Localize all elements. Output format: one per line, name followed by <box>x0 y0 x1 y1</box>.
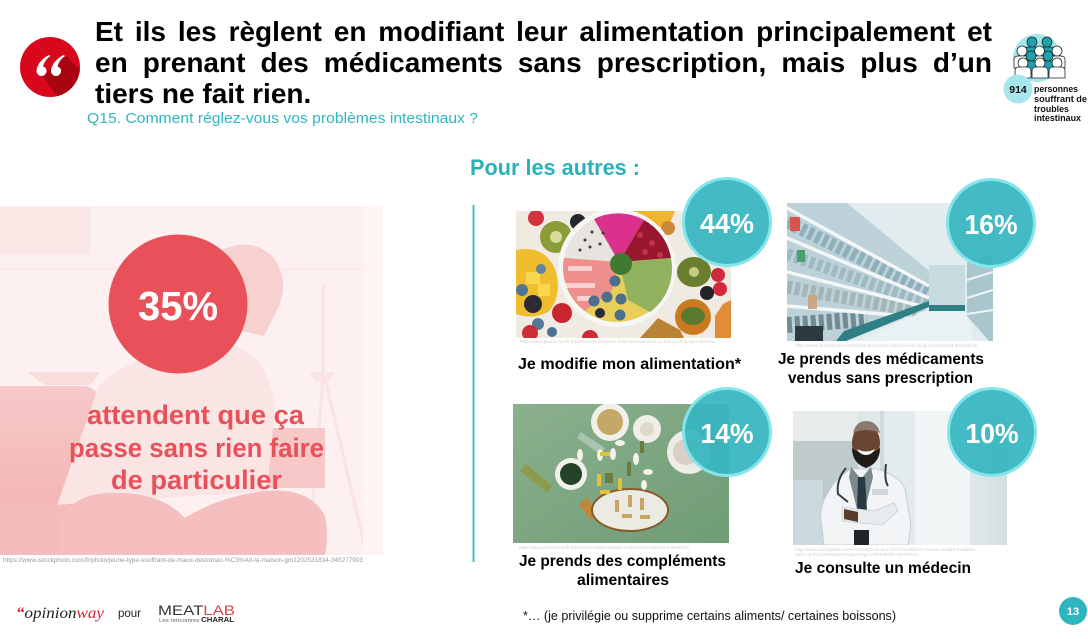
panel statement: attendent que ça <box>87 400 305 430</box>
heading: pour les autres: Pour les autres : <box>470 155 640 180</box>
panel: 35% wait <box>0 206 383 555</box>
photo: pharmacy aisle <box>787 203 993 341</box>
page number: 13 <box>1067 606 1079 618</box>
divider <box>472 205 474 562</box>
stat: 16%: 16% <box>964 209 1018 240</box>
logo: MeatLab <box>158 602 235 624</box>
logo: MeatLab: Les rencontres CHARAL <box>159 617 235 624</box>
label: complements <box>519 553 726 589</box>
title: Et ils les règlent en modifiant leur alimentation principalement et <box>95 16 992 47</box>
label: medecin: Je consulte un médecin <box>795 560 971 577</box>
icon: red quotation badge <box>20 37 82 100</box>
title: tiers ne fait rien. <box>95 78 311 109</box>
page number <box>1059 597 1087 625</box>
photo credit: https://www.istockphoto.com/fr/photo/jeune-type-souffrant-de-maux-destomac-%C3%A0-la-maison-gm1202531834-345277903 <box>3 557 363 564</box>
badge label <box>1034 84 1087 124</box>
badge label: souffrant de <box>1034 94 1087 105</box>
sample size badge <box>1004 34 1087 124</box>
footer: pour: pour <box>118 608 141 620</box>
label: complements: alimentaires <box>577 572 669 589</box>
photo: smiling doctor <box>793 411 1007 545</box>
badge label: personnes <box>1034 84 1078 95</box>
label: medicaments: vendus sans prescription <box>788 370 973 387</box>
stat: 16% <box>948 180 1034 266</box>
stat: 10% <box>948 388 1036 476</box>
badge label: troubles <box>1034 104 1069 115</box>
stat: 44%: 44% <box>700 208 754 239</box>
photo credit: https://www.istockphoto.com/fr/photo/photo-dun-m%C3%A9decin-mature-confiant-travaillant- <box>795 547 977 552</box>
logo: opinionway: “opinion way <box>16 605 104 622</box>
label: complements: Je prends des compléments <box>519 553 726 570</box>
red percentage circle: 35% <box>138 283 218 329</box>
photo: supplements on green <box>513 403 729 543</box>
label: alimentation: Je modifie mon alimentation* <box>518 356 742 373</box>
icon: group of people <box>1013 34 1065 82</box>
title: en prenant des médicaments sans prescription, mais plus d’un <box>95 47 992 78</box>
panel statement: de particulier <box>111 465 282 495</box>
photo credit: https://www.pexels.com/fr-fr/photo/assortiment-de-fruits-tranches-dans-un-bol-en-ceramique-blanche <box>520 339 715 344</box>
photo: fruit bowl <box>516 209 731 346</box>
photo credit: dans-un-h%C3%B4pital-moderne-gm1300089180-437301012 <box>795 552 919 557</box>
stat: 10%: 10% <box>966 418 1019 449</box>
label: medicaments <box>778 351 984 387</box>
panel statement <box>69 400 324 495</box>
photo credit: https://www.istockphoto.com/fr/photo/a-nouveau-besoin-il-est-ici-gm1131284388-300943125 <box>795 343 977 348</box>
badge label: intestinaux <box>1034 113 1082 124</box>
stat: 14% <box>684 388 770 476</box>
footnote: *… (je privilégie ou supprime certains aliments/ certaines boissons) <box>523 609 896 623</box>
stat: 44% <box>684 178 770 266</box>
label: medicaments: Je prends des médicaments <box>778 351 984 368</box>
question subtitle: Q15. Comment réglez-vous vos problèmes intestinaux ? <box>87 111 478 127</box>
photo credit: https://www.pexels.com/fr-fr/photo/bouteilles-tablette-medicament-traitement-3683073/ <box>519 545 690 550</box>
logo: MeatLab: MEAT LAB <box>158 602 235 618</box>
stat: 14%: 14% <box>700 418 754 449</box>
red percentage circle <box>108 234 248 374</box>
title <box>95 16 992 109</box>
photo: man with stomach ache, pink tint <box>0 206 383 555</box>
badge count: 914 <box>1009 84 1027 96</box>
panel statement: passe sans rien faire <box>69 433 324 463</box>
